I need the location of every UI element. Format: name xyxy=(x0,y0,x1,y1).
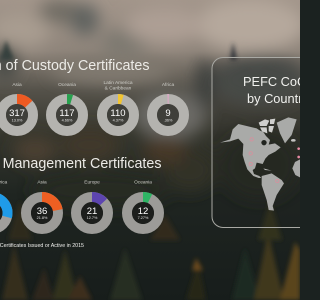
Hudson Bay xyxy=(261,140,267,145)
donut: Asia forest management xyxy=(26,180,58,229)
donut: Latin America and Caribbean chain of custody: & Caribbean xyxy=(105,86,132,92)
donut: Asia chain of custody xyxy=(1,82,33,131)
label: Oceania: Oceania xyxy=(134,180,152,186)
label: Latin America & Caribbean: Latin America xyxy=(103,80,133,86)
Greenland xyxy=(277,117,297,143)
donut: Africa chain of custody: 9 xyxy=(165,108,171,119)
donut: Asia chain of custody: 13.0% xyxy=(12,118,23,122)
label: Africa: Africa xyxy=(162,82,174,88)
panel: PEFC CoC by country xyxy=(212,58,320,228)
label: Oceania: Oceania xyxy=(58,82,76,88)
donut: Oceania chain of custody: 117 xyxy=(59,108,75,119)
donut: Oceania forest management: 12 xyxy=(138,206,148,217)
donut: Oceania chain of custody xyxy=(51,82,83,131)
donut: Africa chain of custody: .36% xyxy=(164,118,173,122)
donut: Europe forest management: 21 xyxy=(87,206,97,217)
South America xyxy=(262,173,284,211)
marker: Canada xyxy=(250,138,253,141)
donut: Oceania forest management xyxy=(127,180,159,229)
donut: Asia chain of custody: 317 xyxy=(9,108,25,119)
donut: Latin America and Caribbean chain of custody: 110 xyxy=(110,108,126,119)
label: Asia: Asia xyxy=(12,82,22,88)
footnote: Certificates Issued or Active in 2015 xyxy=(0,243,84,249)
marker: Iberia xyxy=(297,156,300,158)
marker: USA xyxy=(249,152,252,155)
donut: Asia forest management: 21.8% xyxy=(37,216,48,220)
donut: Asia forest management: 36 xyxy=(37,206,47,217)
donut: Africa chain of custody xyxy=(152,82,184,131)
panel title xyxy=(243,74,309,106)
donut: North America forest management xyxy=(0,180,8,229)
Iceland xyxy=(291,139,296,142)
label: Europe: Europe xyxy=(84,180,100,186)
marker: Mexico xyxy=(249,162,252,166)
marker: Brazil xyxy=(276,179,279,183)
donut: Europe forest management: 12.7% xyxy=(87,216,98,220)
Caribbean xyxy=(263,168,272,171)
world map xyxy=(220,117,300,211)
Arctic islands xyxy=(259,119,275,133)
North America xyxy=(220,124,281,178)
donut: Latin America and Caribbean chain of custody xyxy=(102,80,134,131)
donut: Europe forest management xyxy=(76,180,108,229)
West Africa xyxy=(292,159,300,177)
donut: Oceania forest management: 7.27% xyxy=(138,216,149,220)
marker: Europe xyxy=(297,147,300,150)
donut: Oceania chain of custody: 4.66% xyxy=(62,118,73,122)
label: Asia: Asia xyxy=(37,180,47,186)
donut: Latin America and Caribbean chain of custody: 4.37% xyxy=(113,118,124,122)
